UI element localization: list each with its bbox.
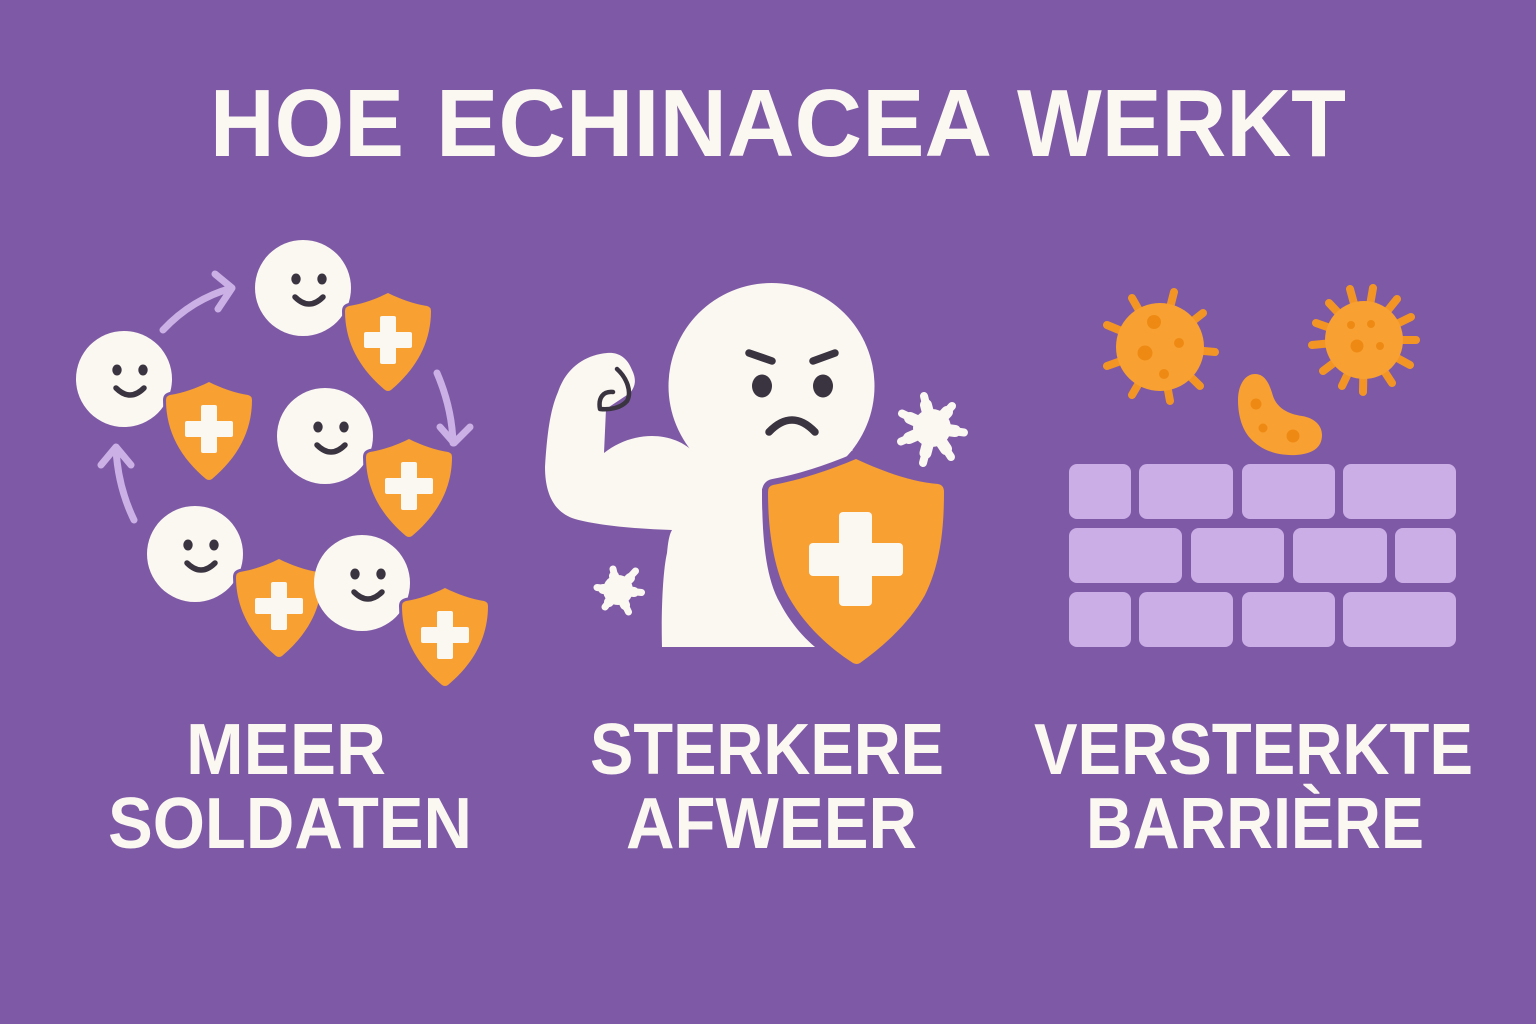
label: meer soldaten: MEER [186,710,386,790]
arrow: right cycle [437,373,470,443]
germ splat right [901,396,964,463]
title: HOE [210,70,404,177]
large shield with cross [768,459,944,664]
soldier 5 with shield [314,535,488,686]
label: meer soldaten [108,710,472,864]
arrow: left cycle [101,447,134,520]
soldier 4 with shield [147,506,322,657]
label: sterkere afweer [590,710,944,864]
title [210,70,1346,177]
virus left [1107,292,1215,401]
brick wall [1069,464,1456,647]
germ splat left [597,569,642,612]
panel: sterkere afweer [545,283,964,664]
soldier 1 with shield [76,331,252,480]
flexing figure [545,283,874,647]
bacterium [1238,374,1322,455]
left eye [752,374,772,398]
right eye [813,374,833,398]
title: WERKT [1017,70,1346,177]
label: sterkere afweer: AFWEER [626,784,917,864]
soldier 2 with shield [255,240,431,391]
arrow: top left cycle [163,274,232,330]
title: ECHINACEA [436,70,992,177]
panel: meer soldaten [76,240,488,686]
virus right [1312,288,1416,392]
frown [769,420,815,432]
label: versterkte barriere: BARRIÈRE [1086,784,1424,864]
label: meer soldaten: SOLDATEN [108,784,472,864]
fist curl [600,369,629,409]
right eyebrow [813,353,835,361]
soldier 3 with shield [277,388,452,537]
label: versterkte barriere [1034,710,1473,864]
panel: versterkte barriere [1069,288,1456,647]
label: sterkere afweer: STERKERE [590,710,944,790]
left eyebrow [749,353,772,361]
label: versterkte barriere: VERSTERKTE [1034,710,1473,790]
